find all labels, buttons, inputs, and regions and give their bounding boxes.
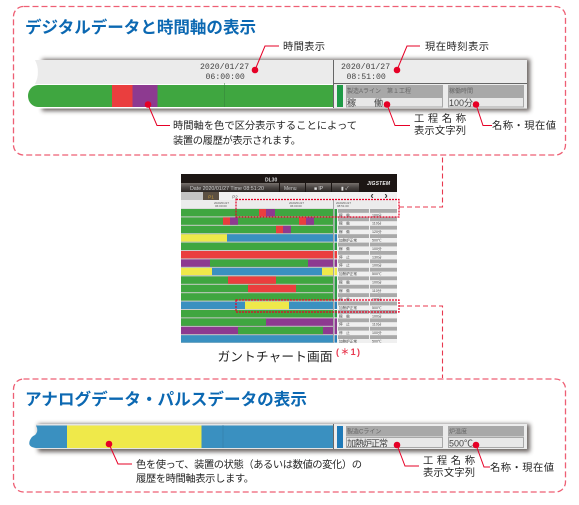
status panel right: 製造Aライン 第１工程 bbox=[347, 87, 411, 95]
gantt status column: 100分 bbox=[372, 280, 382, 285]
gantt timeline: green red purple bbox=[28, 83, 333, 107]
callout: colour state history bbox=[106, 441, 362, 485]
gantt status column: 加熱炉正常 bbox=[339, 338, 357, 344]
gantt status column: 100分 bbox=[372, 296, 382, 302]
callout: name and current value: 名称・現在値 bbox=[492, 119, 556, 132]
callout: current time display bbox=[394, 41, 489, 73]
status panel right bbox=[333, 60, 527, 108]
gantt status column: 稼 働 bbox=[339, 212, 350, 217]
gantt status column bbox=[333, 200, 397, 344]
callout: name and current value bbox=[473, 101, 556, 132]
callout: process name string: 工 程 名 称 bbox=[423, 454, 475, 467]
gantt status column: 稼 働 bbox=[339, 280, 350, 285]
gantt time header: 06:00:00 bbox=[215, 204, 227, 208]
timeline: blue yellow bbox=[29, 425, 333, 448]
callout: time display bbox=[252, 41, 325, 73]
status panel: 加熱炉正常 bbox=[347, 438, 388, 448]
gantt status column: 停 止 bbox=[339, 322, 350, 327]
status panel right: 稼 働 bbox=[347, 97, 383, 108]
gantt status column: 停 止 bbox=[339, 330, 350, 335]
callout: time axis colours: 時間軸を色で区分表示することによって bbox=[173, 119, 357, 132]
callout: name and current value bbox=[473, 442, 554, 474]
status bar: digital bbox=[28, 59, 530, 111]
status panel: 製造Cライン bbox=[347, 428, 381, 436]
status bar: analog bbox=[29, 424, 530, 452]
gantt header: JIGSTEM bbox=[367, 181, 391, 187]
gantt tabs: › bbox=[384, 190, 388, 202]
status panel: 炉温度 bbox=[449, 428, 467, 436]
time label left: 06:00:00 bbox=[206, 73, 245, 82]
gantt tabs bbox=[181, 190, 397, 202]
time label left: 2020/01/27 bbox=[200, 62, 249, 72]
gantt tabs: P2 bbox=[232, 194, 238, 200]
gantt header: ▮ ✓ bbox=[341, 186, 349, 192]
panel: analog and pulse data bbox=[14, 379, 566, 492]
callout: process name string bbox=[384, 101, 466, 137]
gantt header: Date 2020/01/27 Time 08:51:20 bbox=[190, 186, 264, 192]
callout: current time display: 現在時刻表示 bbox=[425, 41, 489, 53]
gantt time header: 2020/01/27 bbox=[289, 201, 304, 205]
gantt time header bbox=[181, 200, 397, 208]
callout: colour state history: 色を使って、装置の状態（あるいは数値の変化）の bbox=[136, 458, 362, 471]
gantt status column: 110分 bbox=[372, 322, 382, 327]
highlight box: upper row bbox=[236, 200, 399, 217]
gantt status column: 稼 働 bbox=[339, 229, 350, 234]
connector: dashed links between panels and gantt bbox=[399, 155, 442, 378]
gantt time header: 08:51:00 bbox=[337, 204, 349, 208]
gantt header bbox=[181, 174, 397, 192]
gantt status column: 停 止 bbox=[339, 254, 350, 259]
status panel: 500℃ bbox=[449, 438, 473, 448]
gantt status column: 稼 働 bbox=[339, 296, 350, 302]
callout: process name string bbox=[394, 442, 475, 479]
callout: process name string: 表示文字列 bbox=[423, 466, 475, 479]
gantt tabs: P1 bbox=[208, 194, 214, 200]
gantt time header: 2020/01/27 bbox=[336, 201, 351, 205]
highlight box: lower row bbox=[236, 300, 399, 312]
status panel right: 08:51:00 bbox=[346, 73, 386, 82]
callout: time display: 時間表示 bbox=[283, 41, 325, 53]
gantt status column: 110分 bbox=[372, 288, 382, 293]
gantt status column: 稼 働 bbox=[339, 221, 350, 226]
gantt time header: 06:00:00 bbox=[290, 204, 302, 208]
time label left bbox=[200, 62, 249, 82]
gantt status column: 停 止 bbox=[339, 263, 350, 268]
gantt caption bbox=[218, 347, 360, 364]
callout: process name string: 工 程 名 称 bbox=[414, 112, 466, 125]
gantt time header: 2020/01/27 bbox=[214, 201, 229, 205]
gantt header: Menu bbox=[284, 186, 297, 192]
gantt status column: 500℃ bbox=[372, 272, 382, 276]
gantt status column: 100分 bbox=[372, 330, 382, 335]
gantt tabs: ‹ bbox=[370, 190, 374, 202]
callout: time axis colours: 装置の履歴が表示されます。 bbox=[173, 134, 301, 147]
status panel bbox=[333, 424, 527, 449]
gantt status column: 加熱炉正常 bbox=[339, 305, 357, 310]
gantt status column: 100分 bbox=[372, 212, 382, 217]
gantt status column: 500℃ bbox=[372, 340, 382, 344]
gantt status column: 100分 bbox=[372, 246, 382, 251]
callout: time axis colours bbox=[145, 101, 357, 147]
gantt status column: 110分 bbox=[372, 221, 382, 226]
gantt status column: 稼 働 bbox=[339, 288, 350, 293]
gantt status column: 稼 働 bbox=[339, 246, 350, 251]
gantt status column: 500℃ bbox=[372, 306, 382, 310]
panel: digital data and time axis bbox=[14, 6, 566, 155]
heading: digital data: デジタルデータと時間軸の表示 bbox=[25, 18, 256, 37]
gantt status column: 加熱炉正常 bbox=[339, 271, 357, 276]
heading: analog pulse: アナログデータ・パルスデータの表示 bbox=[25, 390, 307, 409]
gantt status column: 加熱炉正常 bbox=[339, 238, 357, 242]
gantt chart screen bbox=[181, 174, 399, 344]
status panel right: 100分 bbox=[449, 98, 473, 108]
callout: process name string: 表示文字列 bbox=[414, 124, 466, 137]
gantt status column: 130分 bbox=[372, 254, 382, 259]
gantt header: DL30 bbox=[265, 178, 277, 184]
gantt status column: 稼 働 bbox=[339, 313, 350, 318]
gantt status column: 100分 bbox=[372, 263, 382, 268]
gantt status column: 120分 bbox=[372, 229, 382, 234]
callout: colour state history: 履歴を時間軸表示します。 bbox=[136, 472, 254, 485]
gantt status column: 100分 bbox=[372, 313, 382, 318]
gantt header: ■ IP bbox=[314, 186, 324, 192]
status panel right: 2020/01/27 bbox=[341, 62, 390, 72]
gantt caption: ガントチャート画面 bbox=[218, 350, 332, 364]
gantt bars bbox=[181, 209, 333, 343]
gantt caption: (＊1) bbox=[336, 347, 360, 357]
status panel right: 稼働時間 bbox=[449, 87, 473, 95]
gantt status column: 500℃ bbox=[372, 238, 382, 242]
callout: name and current value: 名称・現在値 bbox=[490, 461, 554, 474]
